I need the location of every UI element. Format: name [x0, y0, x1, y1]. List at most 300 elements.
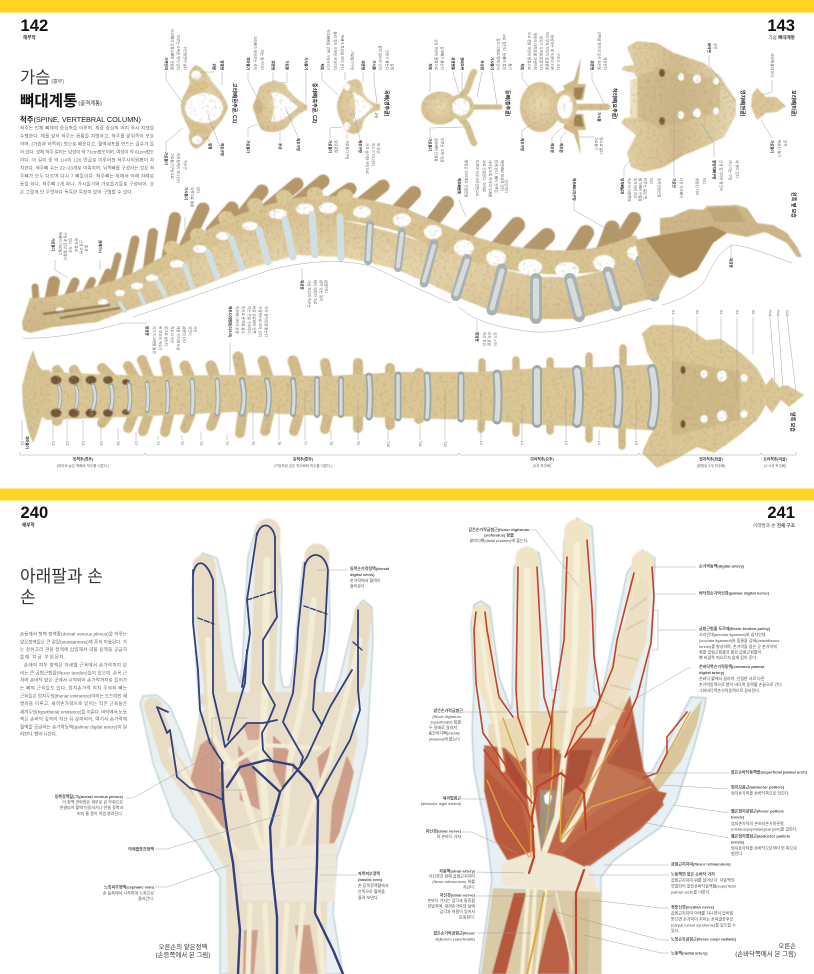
leader lines: left hand: [126, 570, 357, 887]
text block: spine description: 이다. 이 길이 중 약 1/4이 126 연골로 이루어진 척주사이원판이 차: [20, 156, 155, 164]
labels: thoracic: 후궁판: [480, 60, 485, 71]
labels: side spine: 뒤쪽으로 돌출: [190, 187, 195, 208]
vertebra number labels: T9: [356, 441, 360, 445]
vertebra number labels: T10: [386, 441, 390, 447]
labels: side spine: 허리 부위: [482, 332, 487, 346]
labels: right hand right side: 엄지손가락을 손바닥으로부터 먼 쪽으로: [731, 844, 797, 850]
labels: right hand right side: 굽힘근지지띠 아래를 지나면서 압박을: [671, 910, 734, 916]
labels: C2: 치아돌기: [246, 57, 251, 70]
labels: right hand left side: 자동맥(ulnar artery): [439, 868, 476, 874]
labels: sacrum and coccyx: 흔적: [783, 140, 788, 146]
illustration: left hand dorsal veins: [140, 520, 373, 974]
vertebra number labels: S5: [751, 310, 755, 314]
labels: side spine: 된다: [196, 187, 201, 194]
vertebra number labels: C2: [51, 441, 55, 446]
label: dorsal venous plexus: [55, 793, 124, 816]
text: 가시돌: [597, 112, 602, 122]
labels: right hand upper: 고리인대(annular ligament)와 십자인대: [699, 631, 766, 637]
caption: right hand: (손바닥쪽에서 본 그림): [735, 949, 796, 958]
labels: right hand upper: digital artery): [699, 670, 725, 675]
labels: right hand upper: tunnel)를 형성하며, 손가락을 접은 곳 손가락에: [699, 643, 777, 649]
title: chest skeletal system: 뼈대계통: [20, 93, 77, 110]
palm underlay: [488, 700, 655, 866]
region labels below front spine: 등척추(흉추): [293, 456, 314, 462]
labels: lumbar: 크고 콩팥 모양의 몸통으로: [527, 32, 532, 71]
text block: hand description: 혈액을 공급하는 손가락동맥(palmar digital artery)이 갈: [20, 724, 127, 730]
page number 142: 해부학: [23, 34, 36, 41]
labels: cervical: 갈래: [390, 64, 395, 70]
text: 옆으로 넓다: [599, 137, 604, 155]
labels: right hand upper: [468, 526, 783, 693]
labels: right hand left side: 자신경과 함께 굽힘근지지띠: [429, 872, 475, 878]
text block: hand description: 손등에서 정맥 정맥활(dorsal venous plexus)을 이루는: [20, 630, 127, 638]
labels: right hand left side: 운동한다.: [459, 914, 475, 920]
view heading: side: 왼쪽 옆 모습: [790, 192, 797, 218]
text: 가로돌기: [246, 140, 251, 153]
labels: side spine: 척주뼈사이구멍: [572, 178, 577, 201]
labels: cervical: 인대가 붙는다: [385, 50, 390, 71]
labels: side spine: 이차 굽음: [487, 332, 492, 347]
labels: right hand upper: 굽힘근힘줄 도르래(flexor tendon pulley): [699, 625, 771, 631]
view heading: front: 앞쪽 모습: [789, 412, 796, 432]
foramen gaps: [56, 202, 647, 312]
label: cephalic vein: 노쪽피부정맥(cephalic vein): [104, 884, 155, 890]
labels: right hand right side: palmar arch)을 이룬다.: [671, 888, 710, 894]
labels: right hand right side: (metacarpophalangeal joint)을 굽힌다.: [731, 826, 798, 832]
labels: side spine: 척주뼈몸통: [457, 178, 462, 195]
labels: thoracic: 서로 겹친다. 등뼈의 특징: [502, 34, 507, 70]
title: chest skeletal system: (골격계통): [78, 99, 102, 107]
transverse processes: [57, 348, 623, 446]
labels: right hand right side: 받으면 손가락이 저리는 손목굴증후군: [671, 916, 734, 922]
labels: lumbar: 형성하는 데 도움이 되며: [550, 35, 555, 70]
front spine: vertebrae: [22, 325, 804, 468]
labels: right hand left side: 지난다.: [463, 884, 475, 890]
vertebra number labels: S3: [719, 310, 723, 314]
labels: C2: 가로돌: [285, 60, 290, 71]
text block: spine description: 은 그렇게 단 뚜렷하다 독특한 특징이 있어 구별할 수 있다.: [20, 188, 133, 196]
labels: side spine: 갈래가시: [98, 240, 103, 253]
labels: C1: [164, 29, 225, 71]
labels: C1: 위관절면이 넓다: [183, 46, 188, 71]
label: cephalic vein: 손 등쪽에서 시작하여 노쪽으로: [103, 890, 154, 896]
labels: side spine: 바깥 섬유테와 안쪽: [252, 306, 257, 334]
veins: [157, 525, 362, 974]
labels: right hand left side: 손바닥 가지는 감각과 통증을: [428, 897, 475, 903]
labels: lumbar: [520, 32, 608, 71]
labels: right hand right side: 엄지손가락을 손바닥쪽으로 당긴다.: [731, 790, 790, 796]
label: dorsal venous plexus: 등쪽정맥활(그)(dorsal venous plexus): [55, 793, 124, 799]
labels: side spine: 장치로 충격을 흡수: [241, 306, 246, 334]
vertebra heading: lumbar: 허리뼈(요추골): [611, 88, 618, 119]
forearm: [481, 888, 601, 974]
labels: right hand upper: 손가락동맥으로 뻗어 바닥쪽 동맥활 손끝으로 간다.: [699, 681, 783, 687]
caption: left hand: [156, 942, 210, 959]
labels: right hand left side: 중간마디뼈(middle: [428, 730, 461, 736]
labels: side spine: 단단하다: [504, 180, 509, 194]
labels: right hand right side: (carpal tunnel syndrome)을 일으킬 수: [671, 922, 736, 928]
labels: right hand upper: 바닥쪽손가락신경(palmar digital nerve): [699, 590, 770, 596]
labels: side spine: 동맥 통로: [74, 238, 79, 253]
labels: right hand left side: phalanx)에 붙는다: [429, 736, 460, 742]
label: dorsal venous plexus: 이 정맥 연락망은 피부로 큰 부위으로: [62, 798, 123, 804]
region labels below front spine: 목척추(경추): [73, 456, 94, 462]
label: basilic vein: 안쪽으로 혈액을: [358, 888, 385, 894]
labels: side spine: 가슴 부위의 척주는: [307, 280, 312, 308]
vertebra heading: C2: 중쇠뼈(축추골, C2): [311, 83, 318, 123]
text: 가로돌기구멍: [345, 140, 350, 159]
labels: side spine: 앞굽음: [145, 326, 150, 336]
finger tissue: [481, 532, 643, 745]
vertebra number labels: T6: [277, 441, 281, 445]
labels: sacrum and coccyx: 퇴화된 돌기: [777, 140, 782, 157]
curve line under side spine: [23, 245, 792, 338]
text block: spine description: 등을 하나, 척주뼈 2개 하나, 가시돌기와 가로돌기들로 구성되어, 요: [20, 180, 154, 188]
text block: hand description: 비는 큰 굽힘근힘줄(flexor tendon)들이 있으며, 손목 근: [20, 670, 127, 676]
text block: hand description: [20, 630, 128, 738]
labels: side spine: 서로 연결된다. 아래로: [482, 160, 487, 193]
sacrum: anterior view: [621, 41, 736, 172]
labels: side spine: [51, 160, 734, 354]
labels: cervical: [320, 29, 395, 71]
label: dorsal venous plexus: 머리 줄 용이 어렵 뿌려진다.: [77, 810, 123, 816]
labels: right hand upper: 뼈 바깥쪽 떠오르지 않게 잡아 준다.: [699, 654, 757, 660]
arch band: [30, 208, 640, 310]
labels: C1: 뒤활: [212, 64, 217, 71]
palm muscles: [484, 713, 667, 867]
labels: thoracic: 척체: [428, 64, 433, 70]
text: 척추구멍: [220, 143, 225, 156]
labels: right hand left side: 얕은손가락굽힘근(flexor: [433, 930, 475, 936]
vertebra number labels: L5: [634, 441, 638, 445]
text: 가로돌기: [164, 152, 169, 165]
brackets below front spine: [20, 452, 796, 455]
labels: C2: 고리뼈가 회전하는 축이: [253, 36, 258, 70]
labels: side spine: 아기가 고개를 들면: [152, 326, 157, 354]
labels: sacrum and coccyx: 바닥면: [707, 43, 712, 53]
vertebra number labels: T2: [180, 441, 184, 445]
vertebra number labels: T1: [156, 441, 160, 445]
side spine: vertebral bodies, arches and spinous processes: [22, 181, 654, 333]
labels: right hand left side: (flexor digitorum: [432, 714, 462, 719]
finger and palm tissue: [153, 531, 363, 808]
text: 척추판: [559, 143, 564, 153]
tendons: [481, 545, 613, 850]
page number 143: 143: [767, 16, 795, 35]
labels: side spine: 가로돌기: [51, 238, 56, 251]
labels: lumbar: 척체: [520, 64, 525, 70]
title: chest skeletal system: [20, 68, 102, 110]
vertebra number labels: C1: [20, 441, 24, 446]
text: 이루는 오목 있음: [440, 138, 445, 163]
vertebra: lumbar: [520, 57, 607, 155]
sacrum and coccyx: side view: [635, 205, 802, 300]
labels: right hand upper: profundus) 힘줄: [484, 532, 514, 538]
labels: side spine: 신경 고랑: [79, 240, 84, 255]
labels: sacrum and coccyx: 지나가는 구멍: [728, 160, 733, 180]
labels: right hand right side: 벌린다.: [731, 850, 743, 856]
labels: side spine: 하는 연골 구조이다.: [247, 306, 252, 335]
labels: side spine: 굽음이다: [324, 280, 329, 294]
text: 앞활: [208, 143, 213, 150]
caption: right hand: 오른손: [778, 942, 796, 950]
text: 후궁: [278, 143, 283, 150]
caption: right hand: [735, 942, 796, 958]
region labels below front spine: 꼬리척추(미골): [763, 456, 787, 462]
labels: cervical: 척체: [320, 64, 325, 70]
front spine: discs: [59, 369, 655, 425]
labels: side spine: 뒤굽음: [300, 280, 305, 290]
labels: sacrum and coccyx: 위면: [713, 43, 718, 49]
vertebra: atlas C1: [181, 65, 228, 149]
cervical shadow pockets: [50, 376, 130, 418]
labels: sacrum and coccyx: 엉치엉덩관절: [657, 178, 662, 197]
labels: sacrum and coccyx: 융합된 자리: [695, 178, 700, 195]
vertebra number labels: T11: [418, 441, 422, 447]
vertebra heading: sacrum: 엉치뼈(천골): [739, 90, 746, 117]
label: basilic vein: (basilic vein): [358, 877, 383, 882]
number leader lines: [22, 317, 796, 440]
pulleys on finger: [592, 575, 650, 728]
labels: side spine: 몸통은 위아래로 관절면을: [464, 160, 469, 198]
labels: right hand left side: 새끼벌림근: [443, 794, 461, 800]
vertebra number labels: C7: [134, 441, 138, 446]
page number 142: 142: [20, 16, 48, 35]
labels: side spine: 생긴다: [188, 326, 193, 336]
labels: side spine: 속질핵으로 되어 있다: [258, 306, 263, 338]
leader lines: spine: [55, 55, 772, 373]
label: dorsal digital veins: digital veins): [350, 572, 375, 577]
labels: side spine: 태아 때부터 뒤로: [313, 280, 318, 305]
vertebra: thoracic: [421, 72, 500, 143]
label: basilic vein: [358, 870, 389, 900]
labels: C1: 이루는 오목한 면이 있다: [176, 35, 181, 71]
label: basilic vein: 올려 보낸다.: [358, 894, 379, 900]
labels: cervical: 들려 있어 오목한 모양이다: [333, 32, 338, 71]
text: 가로돌기: [328, 140, 333, 153]
labels: right hand left side: [421, 707, 476, 942]
labels: right hand upper: 그와바닥쪽손가락동맥으로 갈라진다.: [699, 687, 760, 693]
labels: side spine: 척주뼈 사이의 완충: [235, 306, 240, 334]
vertebra number labels: T4: [225, 441, 229, 445]
labels: right hand right side: 굽힘근지지띠 위를 일어난다. 자동맥의: [671, 876, 735, 882]
labels: right hand right side: 있다.: [671, 927, 679, 933]
labels: sacrum and coccyx: 신경 앞가지와 혈관이: [719, 160, 724, 191]
labels: right hand left side: 얕은손가락굽힘근: [434, 707, 463, 713]
text block: hand description: 을에 지금 부임된다.: [20, 654, 66, 660]
labels: side spine: 척주사이원판(디스크): [228, 306, 233, 337]
caption: left hand: (손등쪽에서 본 그림): [156, 950, 210, 959]
C1 front: [22, 350, 50, 443]
label: basilic tributary: 아래팔중간정맥: [128, 846, 154, 852]
vertebra number labels: 치아돌기: [25, 436, 30, 449]
text block: hand description: 처와 손바닥 얕은 곳에서 시작되어 손가락까지로 들어가: [20, 676, 127, 684]
labels: sacrum and coccyx: 꼬리뼈 뿔과 바닥: [770, 53, 775, 78]
labels: side spine: 앞으로 굽는다: [164, 326, 169, 347]
vertebra number labels: L1: [479, 441, 483, 445]
vertebra number labels: C4: [81, 441, 85, 446]
vertebra number labels: S1: [671, 310, 675, 314]
text: 척추구멍: [296, 138, 301, 151]
label: cephalic vein: 올라간다.: [138, 895, 154, 901]
labels: sacrum and coccyx: 척주의 아래쪽에: [627, 178, 632, 202]
labels: right hand right side: 얕은손바닥동맥활(superficial palmar arch): [731, 768, 808, 774]
labels: right hand right side: 엄지손가락의 손허리손가락관절: [731, 820, 784, 826]
vertebra number labels: Co1: [768, 310, 772, 316]
page number 143: 가슴 뼈대계통: [768, 34, 796, 41]
labels: right hand right side: 짧은엄지굽힘근(flexor pollicis: [731, 808, 785, 814]
vertebra number labels: L4: [597, 441, 601, 445]
labels: lumbar: 앞뒤가 두꺼워 튼튼하다: [539, 36, 544, 71]
heading: spine: 척주(SPINE, VERTEBRAL COLUMN): [20, 114, 141, 124]
skin outline: [471, 518, 706, 974]
text block: spine description: 하며, (가슴과 허쪽의) 첫으로 배운다고, 혈액세포를 만드는 골수가 들: [20, 140, 154, 148]
labels: side spine: 굽음이 된다: [182, 326, 187, 344]
labels: right hand upper: 힘줄 굽힘근힘줄과 붙은 굽힘근힘줄이: [699, 648, 762, 654]
labels: side spine: 이루며 척주사이원판으로: [475, 160, 480, 197]
labels: side spine: 목 부위의 척주가: [158, 326, 163, 351]
labels: cervical: 척주뼈몸통 위쪽 가장자리가: [326, 29, 331, 71]
text block: spine description: 수행한다. 체를 앞서 척주는 몸통을 지탱하고, 척주를 앞뒤쪽이 보호: [20, 132, 154, 140]
arteries: [474, 540, 687, 974]
labels: cervical: 목뼈의 특징을 보여 준다: [340, 35, 345, 71]
labels: C1: 머리뼈의 뒤통수뼈와 관절을: [170, 29, 175, 71]
labels: right hand right side: 정중신경(median nerve): [671, 904, 715, 910]
text: 고랑: [374, 112, 379, 119]
labels: sacrum and coccyx: 가로선: [672, 178, 677, 188]
cervical shadow: [43, 305, 120, 318]
label: dorsal digital veins: 등쪽손가락정맥(dorsal: [350, 565, 389, 571]
labels: C1: 가쪽덩이: [164, 57, 169, 70]
labels: side spine: 체중 지지에 도움: [176, 326, 181, 351]
labels: side spine: 가시돌기: [184, 187, 189, 200]
labels: right hand left side: 자신경(ulnar nerve): [440, 892, 476, 898]
text block: hand description: 는 뼈의 근육들도 있다. 엄지손가락 지지 주의의 뼈는: [20, 684, 127, 692]
labels: lumbar: 구조가 크다: [556, 53, 561, 71]
labels: right hand right side: 짧은엄지벌림근(abductor pollicis: [731, 832, 791, 838]
labels: lumbar: 위관절: [590, 60, 595, 70]
labels: right hand right side: [671, 768, 808, 956]
region labels below front spine: 엉치척추(천골): [699, 456, 723, 462]
vertebra number labels: S4: [735, 310, 739, 314]
labels: C2: 위관절: [271, 60, 276, 70]
vertebra number labels: [20, 310, 789, 449]
labels: right hand left side: (abductor digiti minimi): [421, 801, 462, 806]
tendons: [170, 560, 360, 974]
labels: right hand left side: digitorum superficialis): [435, 936, 476, 942]
labels: side spine: 내려갈수록 커지며 무게를: [488, 160, 493, 198]
labels: C2: 가시돌기: [304, 57, 309, 70]
labels: right hand right side: 노쪽손목굽힘근(flexor carpi radialis): [671, 936, 737, 942]
labels: thoracic: 갈비오목: [460, 57, 465, 71]
labels: side spine: 통과: [84, 245, 89, 252]
text: 척추동맥이 지나간다: [176, 153, 181, 184]
labels: side spine: 척주 움직임을 돕는다: [264, 306, 269, 338]
vertebra number labels: T5: [251, 441, 255, 445]
extensor retinaculum: [237, 843, 337, 902]
region labels below front spine: 허리척추(요추): [530, 456, 554, 462]
labels: right hand upper: 손바닥 활에서 갈라져, 인접한 서로 다른: [699, 675, 765, 681]
labels: right hand upper: 온바닥쪽손가락동맥(common palmar: [699, 663, 765, 669]
labels: sacrum and coccyx: 네 쌍이 있다: [735, 160, 740, 179]
labels: side spine: 앞굽음: [475, 332, 480, 342]
nerves: [487, 700, 690, 974]
labels: right hand upper: (cruciate ligament)와 힘줄을 감싸(osteofibrous: [699, 637, 779, 643]
labels: right hand upper: 손가락동맥(digital artery): [699, 562, 745, 568]
labels: lumbar: 제한한다: [603, 57, 608, 71]
text block: spine description: 어 있다. 성체 척주 길이는 남성이 약 71cm정도이며, 여성이 약 61cm정도: [20, 148, 154, 156]
labels: C2: [246, 36, 309, 71]
labels: right hand left side: 의 손바닥 가지: [437, 833, 461, 839]
labels: sacrum and coccyx: 엉치뼈날개: [620, 178, 625, 194]
page number 241: 아래팔과 손 전체 구조: [753, 522, 796, 529]
vertebral bodies: [22, 218, 654, 333]
sacrum front: [642, 325, 804, 468]
labels: right hand left side: superficialis) 힘줄: [430, 718, 461, 724]
text: 척주관: [183, 160, 188, 170]
labels: right hand left side: (flexor retinaculum) 위를: [432, 878, 475, 884]
palm base: [484, 695, 664, 866]
text block: spine description: [20, 124, 155, 196]
text: 갈비뼈와 관절을: [434, 138, 439, 162]
vertebra number labels: C5: [99, 441, 103, 446]
vertebra number labels: T7: [303, 441, 307, 445]
text: 앞뒤결절: [334, 140, 339, 153]
vertebra number labels: C3: [65, 441, 69, 446]
labels: side spine: 구멍과 앞뒤 결절이: [63, 232, 68, 260]
bracket inside hand: [212, 718, 247, 790]
labels: thoracic: 길고 아래로 향해 있어: [496, 38, 501, 70]
vertebra number labels: L2: [520, 441, 524, 445]
page number 240: 240: [20, 503, 48, 522]
labels: lumbar: 허리 부위 척주의 앞굽음을: [545, 32, 550, 71]
region labels below front spine: (구멍처럼 굳은 척주뼈와 척주를 이룬다.): [274, 463, 332, 468]
labels: side spine: 목뼈의 가로돌기: [58, 232, 63, 256]
text: 척추구멍: [520, 138, 525, 151]
labels: right hand left side: 전달하며, 새끼손가락의 살에: [428, 902, 475, 908]
labels: sacrum and coccyx: 가로돌기: [770, 140, 775, 153]
vertebra number labels: S2: [695, 310, 699, 314]
muscles: [188, 722, 354, 974]
text: 척추구멍: [358, 140, 363, 153]
labels: side spine: 굽어 있는 일차: [319, 280, 324, 302]
region labels below front spine: (5개 척주뼈): [533, 463, 551, 468]
labels: thoracic: 가시돌기: [490, 57, 495, 70]
labels: right hand right side: brevis): [731, 814, 745, 820]
labels: side spine: 걷기 시작: [493, 332, 498, 347]
region labels below front spine: (머리와 높은 목뼈와 척주를 이룬다.): [57, 463, 109, 468]
labels: sacrum and coccyx: 앞엉치뼈구멍: [712, 160, 717, 179]
labels: cervical: 위관절: [361, 60, 366, 70]
vertebra heading: coccyx: 꼬리뼈(미골): [790, 90, 797, 117]
flexor retinaculum: [501, 850, 601, 897]
labels: sacrum and coccyx: 위치하며 좌우: [633, 178, 638, 199]
labels: right hand right side: 굽힘근지지띠(flexor retinaculum): [671, 860, 731, 866]
vertebra number labels: C6: [116, 441, 120, 446]
leader lines: right hand: [462, 530, 729, 953]
labels: right hand right side: 노동맥의 얕은 손바닥 가지: [671, 870, 715, 876]
text: 가로돌기: [428, 138, 433, 151]
label: dorsal digital veins: 들어온다.: [350, 582, 366, 588]
labels: thoracic: [428, 34, 513, 71]
vertebra: cervical: [337, 79, 380, 134]
title: chest skeletal system: 가슴(흉부): [20, 68, 64, 87]
vertebra heading: cervical: 목뼈(경추골): [383, 90, 390, 117]
region labels below front spine: (3~5개 척주뼈): [764, 463, 786, 468]
text block: hand description: 발육을 이루고, 새끼손가락으로 있어는 작은 근육들은: [20, 700, 127, 707]
labels: side spine: 해면뼈로 채워져 있다: [500, 160, 505, 192]
labels: cervical: 가로돌기구멍: [350, 51, 355, 70]
